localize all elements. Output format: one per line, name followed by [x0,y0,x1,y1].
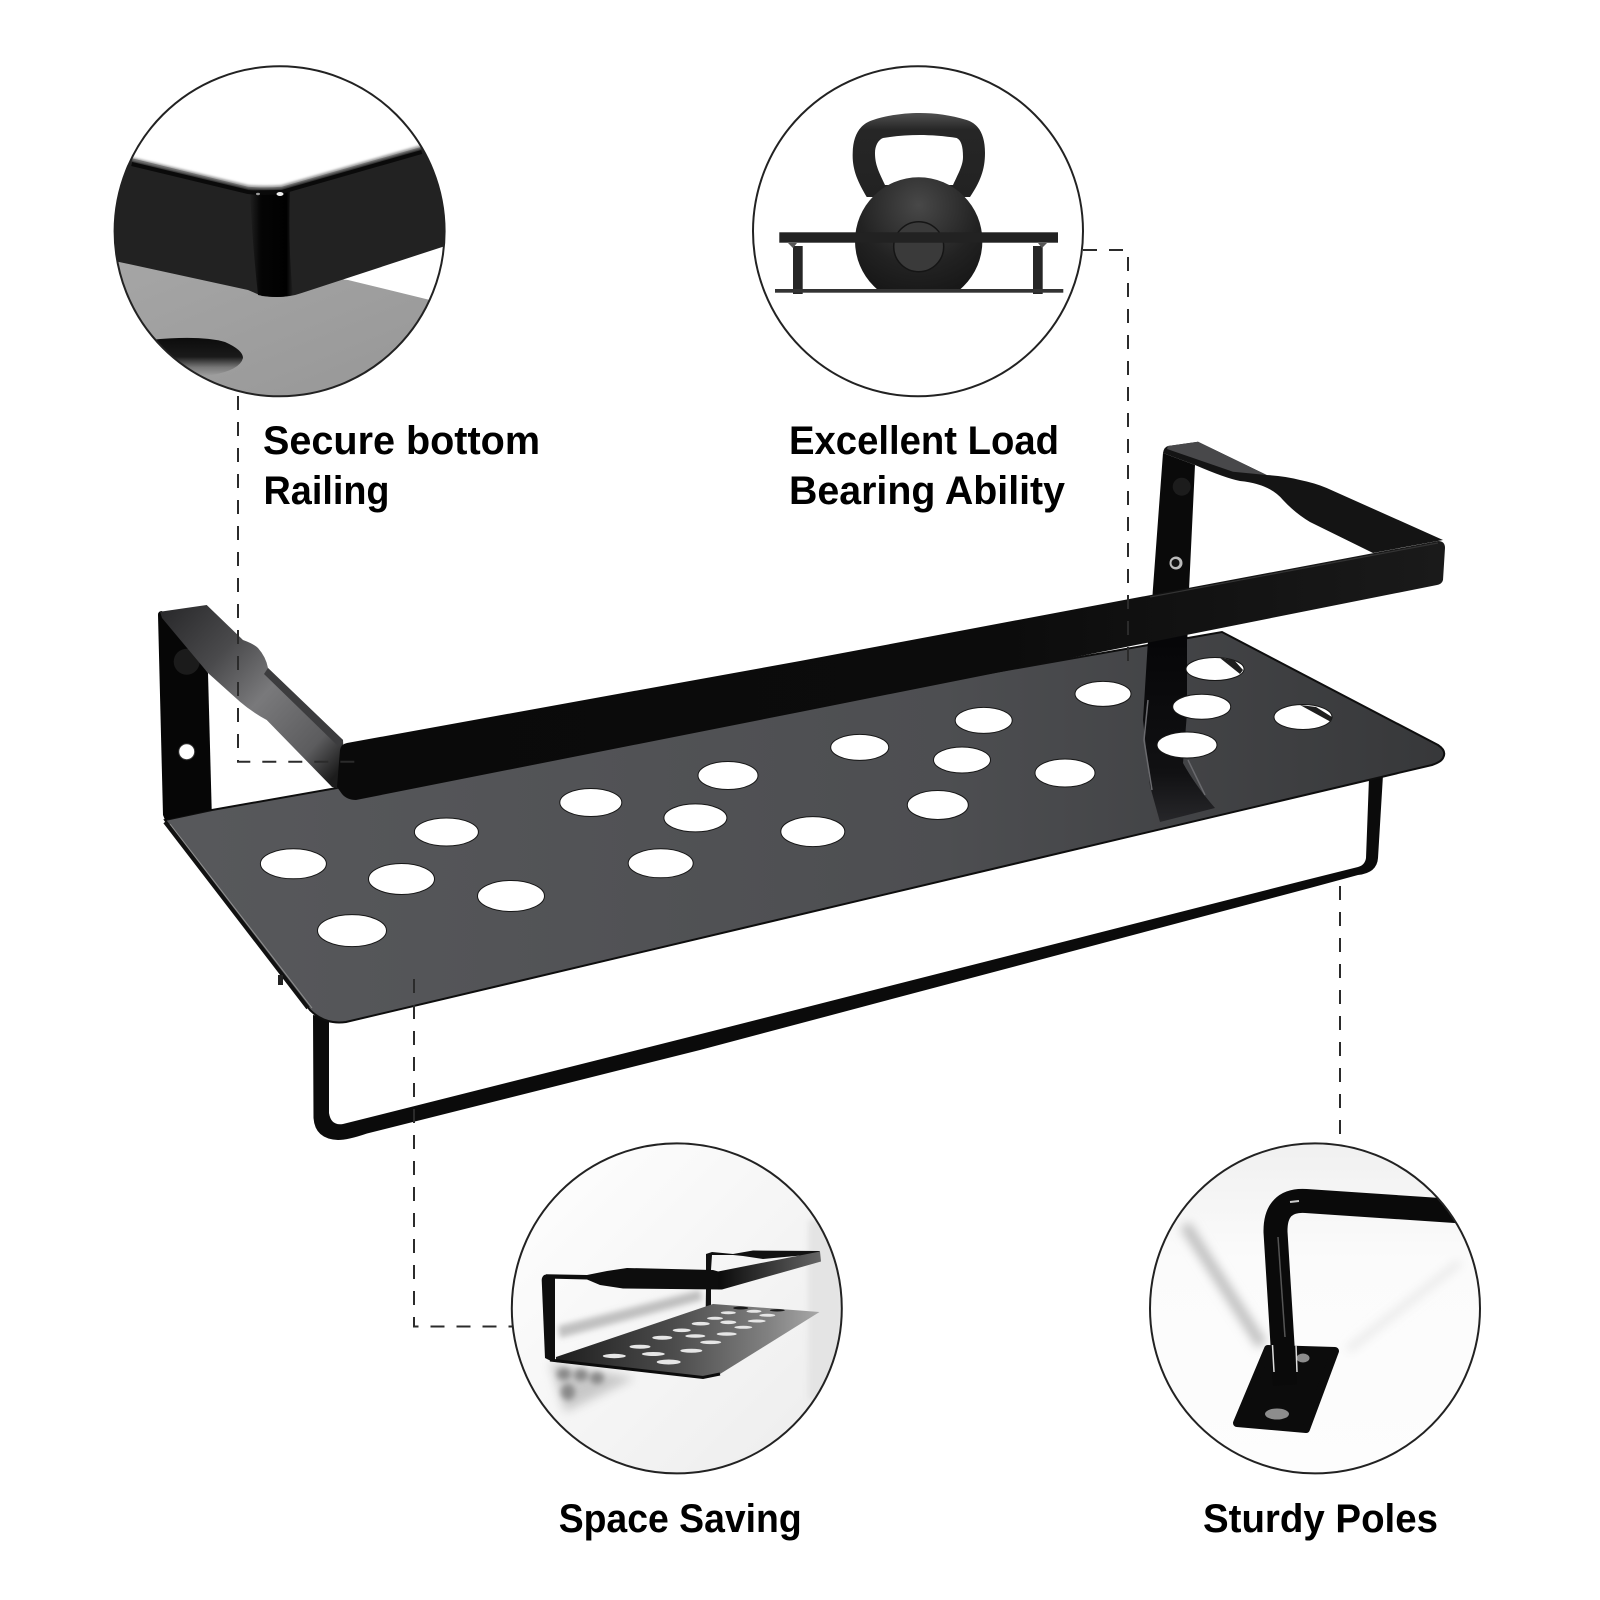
circle outline [753,66,1083,396]
rail top highlight [132,147,422,187]
shelf brackets [793,246,1043,294]
perforation close-up [156,338,243,374]
leader line [1083,250,1128,662]
leader line [1339,886,1341,1138]
kettlebell handle [853,113,985,197]
front rail right section [718,1252,821,1290]
detail photo: rail corner [116,144,444,396]
detail photo: kettlebell on shelf [775,113,1064,294]
back rail arm [706,1250,820,1270]
right bracket screw [1173,478,1191,496]
rail glints [256,192,284,196]
rail dark under highlight [132,152,422,193]
callout: excellent load bearing ability [753,66,1128,662]
left arm dark edge [264,668,343,746]
shelf plate front edge [550,1360,720,1378]
kettlebell base circle [894,222,944,272]
product: wall shelf with rail and towel bar [158,442,1445,1140]
rail top highlight [1150,543,1438,597]
front top rail [337,541,1445,800]
detail photo: towel bar pole [1173,1144,1462,1433]
circle outline [512,1143,842,1473]
right bracket upright [1150,453,1195,650]
right bracket hole [1170,556,1182,570]
rail corner shading [250,190,293,297]
bracket gussets [788,243,1047,248]
heading: Sturdy Poles [1203,1497,1438,1541]
reflection streaks [1144,700,1205,795]
shelf plate holes [603,1310,775,1364]
shelf plate [775,289,1063,293]
heading: Space Saving [559,1497,802,1541]
pole highlights [1272,1201,1299,1372]
pole tube [1264,1188,1456,1346]
back bracket upright [706,1289,711,1306]
heading: Railing [264,469,390,513]
leader line [238,396,356,762]
left bracket hole [179,744,195,760]
rail band [116,147,444,297]
left bracket screw [174,649,200,675]
left rail arm [160,605,346,790]
left bracket [542,1274,555,1361]
shelf top rail [779,232,1058,243]
wall shadows [1185,1225,1460,1350]
perforated shelf plate [165,632,1444,1022]
plate close-up [118,262,429,396]
circle outline [1150,1143,1480,1473]
front rail with arm [546,1268,720,1290]
rail arm seen through holes [1220,658,1332,722]
left bracket upright [158,611,212,820]
callout: space saving [414,979,843,1541]
infographic canvas [114,65,1481,1540]
dark plate holes [733,1306,785,1312]
kettlebell body [855,177,982,289]
base plate holes [1265,1354,1310,1420]
heading: Excellent Load [789,419,1059,463]
callout: secure bottom railing [100,66,551,762]
leader line [414,979,512,1326]
plate glossy reflection [1143,632,1215,822]
plate holes [260,658,1332,947]
circle outline [115,66,445,396]
towel bar [313,775,1383,1140]
wall strip [808,1220,843,1400]
right rail arm [1163,442,1443,553]
plate side edge [165,822,312,1008]
detail photo: shelf on wall [539,1171,841,1472]
heading: Secure bottom [263,419,540,463]
plate mounting tab [278,975,283,985]
mounting base plate [1237,1349,1335,1429]
shelf plate [556,1304,820,1377]
heading: Bearing Ability [789,469,1066,513]
callout: sturdy poles [1150,886,1480,1541]
soft plate shadow [550,1362,635,1412]
wall shadows [557,1290,702,1400]
